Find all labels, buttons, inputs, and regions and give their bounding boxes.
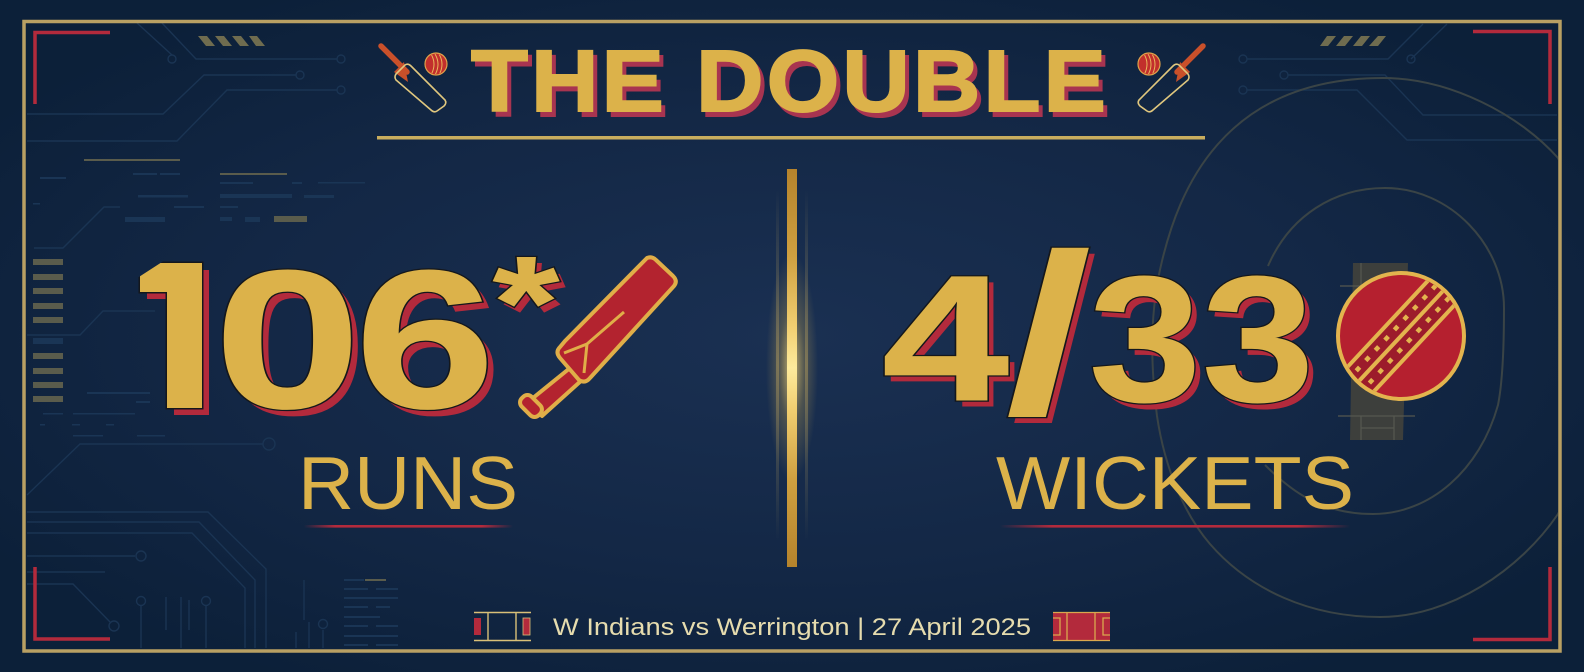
- corner bracket: top left: [35, 32, 110, 104]
- stat: 4/33 wickets figure: 3: [1202, 239, 1314, 439]
- circuit pattern: top right: [1239, 24, 1557, 140]
- stat: 4/33 wickets figure: 4: [882, 238, 1009, 438]
- icon: large bat: [518, 257, 676, 419]
- stat: 4/33 wickets figure: /: [1006, 207, 1091, 460]
- stat: 4/33 wickets figure: 3: [1089, 239, 1201, 439]
- tick marks: top right: [1320, 36, 1386, 46]
- stat: 106* runs figure: *: [499, 235, 566, 381]
- icon: footer pitch right: [1053, 612, 1110, 641]
- title underline: [377, 136, 1205, 140]
- label: wickets: WICKETS: [996, 441, 1354, 525]
- stat: 106* runs figure: 0: [214, 230, 361, 450]
- title: THE DOUBLE: [471, 33, 1109, 130]
- wickets underline: [1000, 525, 1350, 528]
- corner bracket: bottom right: [1473, 567, 1550, 640]
- circuit pattern: top left: [27, 23, 365, 335]
- stat: 106* runs figure: 0: [214, 230, 361, 450]
- stat: 4/33 wickets figure: 3: [1208, 245, 1320, 445]
- icon: left mini bat and ball: [381, 46, 447, 112]
- stat: 4/33 wickets figure: 3: [1089, 239, 1201, 439]
- corner bracket: top right: [1473, 32, 1550, 104]
- corner bracket: bottom left: [35, 567, 110, 639]
- centre divider: [766, 169, 818, 567]
- tick marks: top left: [198, 36, 265, 46]
- stat: 4/33 wickets figure: 4: [882, 238, 1009, 438]
- cricket field outline: [1152, 78, 1584, 617]
- stat: 106* runs figure: 6: [362, 236, 502, 456]
- stat: 4/33 wickets figure: /: [1012, 213, 1097, 466]
- stat: 106* runs figure: *: [493, 229, 560, 375]
- stat: 4/33 wickets figure: /: [1006, 207, 1091, 460]
- stat: 4/33 wickets figure: 4: [888, 244, 1015, 444]
- stat: 4/33 wickets figure: 3: [1095, 245, 1207, 445]
- stat: 106* runs figure: 1: [136, 236, 244, 454]
- stat: 106* runs figure: *: [493, 229, 560, 375]
- circuit pattern: bottom left: [27, 392, 398, 648]
- stat: 106* runs figure: 6: [355, 230, 495, 450]
- cricket pitch: [1338, 263, 1415, 440]
- label: runs: RUNS: [298, 441, 518, 525]
- stat: 106* runs figure: 0: [221, 236, 368, 456]
- icon: footer pitch left: [474, 612, 531, 641]
- stat: 106* runs figure: 1: [129, 229, 237, 447]
- stat: 106* runs figure: 6: [355, 230, 495, 450]
- stat: 106* runs figure: 1: [129, 229, 237, 447]
- match details: W Indians vs Werrington | 27 April 2025: [553, 614, 1031, 641]
- stat: 4/33 wickets figure: 3: [1202, 239, 1314, 439]
- stat: 4/33 wickets figure: [882, 207, 1320, 466]
- icon: right mini bat and ball: [1138, 46, 1203, 112]
- icon: large cricket ball: [1338, 273, 1464, 399]
- stat: 106* runs figure: [138, 256, 566, 416]
- indicator bars: left: [33, 259, 63, 402]
- title: THE DOUBLE: [475, 38, 1113, 135]
- runs underline: [304, 525, 513, 528]
